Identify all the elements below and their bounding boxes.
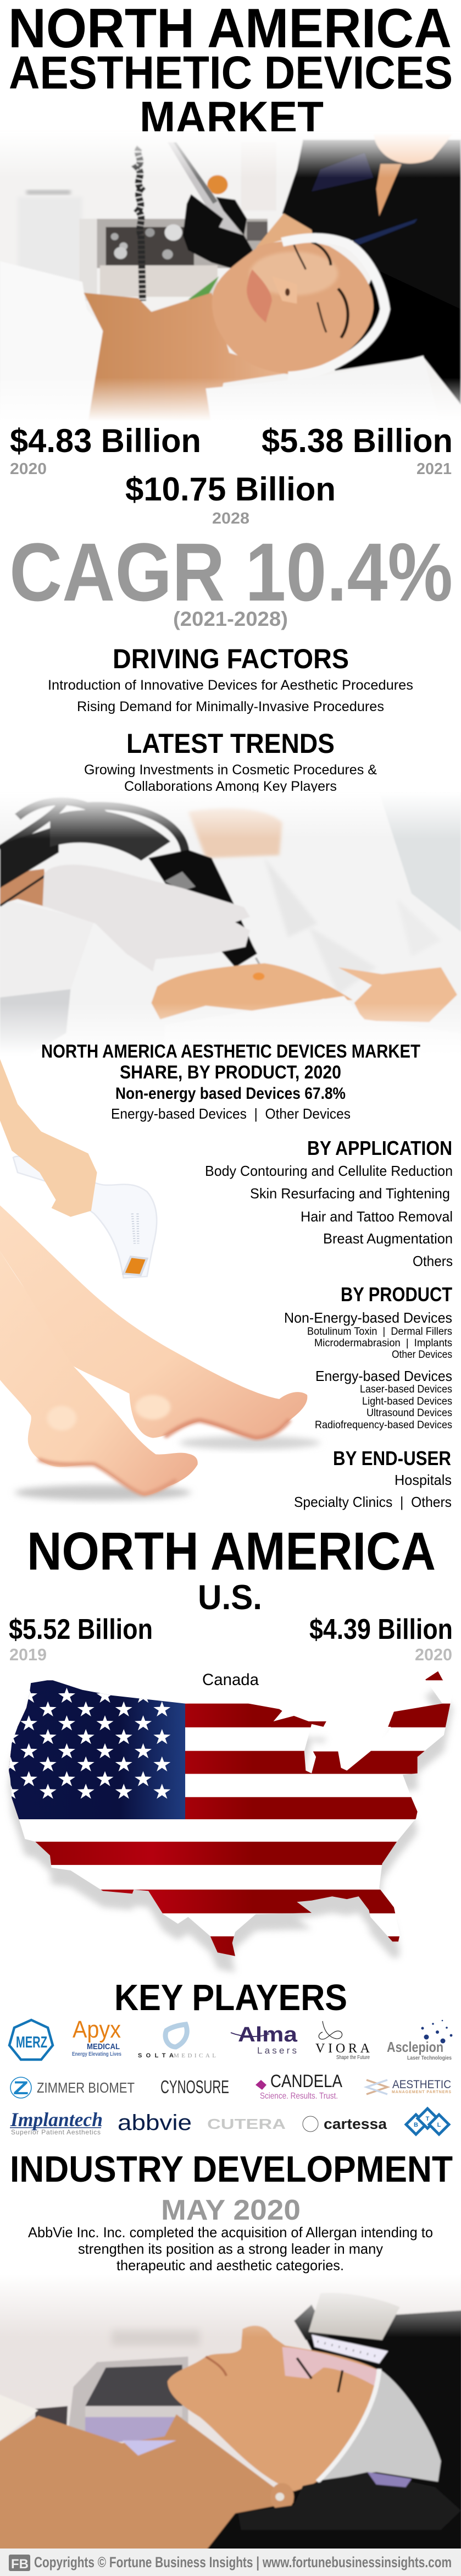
logo: BTL — [406, 2109, 449, 2134]
by product: Ultrasound Devices — [366, 1407, 452, 1419]
logo: Candela: Science. Results. Trust. — [260, 2091, 338, 2101]
ear — [270, 2483, 294, 2511]
face — [212, 241, 374, 375]
by end-user — [294, 1447, 452, 1510]
driving factors: Introduction of Innovative Devices for Aesthetic Procedures — [48, 678, 413, 693]
by product: Energy-based Devices — [315, 1368, 452, 1384]
face — [168, 2326, 379, 2491]
market share by product: Non-energy based Devices 67.8% — [115, 1085, 346, 1103]
logo: Viora: Shape the Future — [336, 2055, 370, 2061]
by product: Light-based Devices — [362, 1396, 452, 1407]
by product: Radiofrequency-based Devices — [315, 1419, 452, 1431]
title: MARKET — [140, 92, 324, 143]
by application: Hair and Tattoo Removal — [301, 1208, 453, 1225]
market share by product: Energy-based Devices | Other Devices — [111, 1105, 351, 1122]
logo: Viora — [315, 2021, 370, 2061]
by product: Microdermabrasion | Implants — [314, 1337, 452, 1349]
market size stats: $10.75 Billion — [125, 471, 336, 508]
logo: Asclepion: Asclepion — [387, 2039, 443, 2055]
industry development: strengthen its position as a strong leader in many — [78, 2241, 383, 2257]
market size stats: 2020 — [10, 460, 47, 478]
by application: Breast Augmentation — [323, 1230, 453, 1247]
laser handpiece — [169, 143, 242, 236]
logo: Implantech: Superior Patient Aesthetics — [11, 2128, 101, 2136]
practitioner coat — [0, 899, 94, 998]
logo: Apyx Medical: Apyx — [73, 2016, 121, 2043]
latest trends: Growing Investments in Cosmetic Procedures & — [84, 762, 377, 778]
logo: Viora: VIORA — [315, 2041, 370, 2056]
market share by product — [41, 1041, 420, 1122]
latest trends: LATEST TRENDS — [126, 728, 335, 759]
photo: laser on hand — [0, 787, 461, 1060]
collar — [0, 2392, 38, 2445]
logo: Solta Medical — [138, 2024, 216, 2059]
dark background — [200, 2310, 461, 2555]
market size stats — [10, 422, 453, 527]
industry development — [10, 2149, 453, 2274]
by application: Others — [413, 1253, 453, 1269]
by product: Non-Energy-based Devices — [284, 1309, 452, 1326]
shadows — [15, 1485, 191, 1500]
by product: Botulinum Toxin | Dermal Fillers — [307, 1326, 452, 1337]
logo: Cynosure: CYNOSURE — [160, 2077, 229, 2097]
U.S. market values: Canada — [202, 1671, 259, 1689]
key player logos — [9, 2016, 452, 2136]
logo: Asclepion: Laser Technologies — [407, 2055, 452, 2061]
logo: Alma Lasers: Lasers — [257, 2045, 297, 2056]
logo: Candela — [256, 2071, 343, 2101]
by end-user: Specialty Clinics | Others — [294, 1494, 452, 1510]
laser device — [148, 850, 257, 967]
logo: Merz: MERZ — [16, 2034, 47, 2051]
map: U.S. flag — [0, 1656, 461, 1979]
latest trends — [84, 728, 377, 794]
treated hand — [152, 963, 353, 1019]
logo: Zimmer Biomet — [10, 2077, 135, 2099]
by product: Laser-based Devices — [360, 1384, 452, 1395]
CAGR callout: (2021-2028) — [173, 608, 288, 630]
driving factors: DRIVING FACTORS — [113, 643, 349, 674]
title — [8, 0, 453, 143]
logo: AbbVie: abbvie — [118, 2111, 192, 2135]
logo: Implantech: Implantech — [10, 2109, 103, 2131]
logo: BTL: T — [426, 2116, 430, 2122]
industry development: therapeutic and aesthetic categories. — [116, 2257, 344, 2274]
white robe folds — [264, 858, 318, 937]
industry development: AbbVie Inc. Inc. completed the acquisition of Allergan intending to — [28, 2224, 433, 2241]
logo: Solta Medical: MEDICAL — [174, 2052, 216, 2059]
cable — [0, 801, 185, 852]
logo: Solta Medical: SOLTA — [138, 2052, 174, 2059]
LED applicator — [309, 2293, 400, 2340]
logo: Cartessa: cartessa — [324, 2116, 387, 2132]
logo: Asclepion — [387, 2020, 452, 2061]
logo: Merz — [9, 2020, 53, 2060]
by application — [205, 1137, 453, 1269]
market size stats: 2028 — [212, 510, 249, 527]
logo: Zimmer Biomet: Z — [13, 2078, 29, 2099]
by application: Skin Resurfacing and Tightening — [250, 1185, 450, 1202]
gloved hand — [183, 194, 253, 269]
illustration: hand with device and legs — [0, 1059, 320, 1500]
market size stats: 2021 — [416, 460, 452, 478]
market size stats: $4.83 Billion — [10, 422, 201, 459]
logo: Aesthetic Management Partners: AESTHETIC — [392, 2078, 451, 2091]
regional heading — [27, 1521, 436, 1617]
by application: Body Contouring and Cellulite Reduction — [205, 1163, 453, 1179]
U.S. market values: 2020 — [415, 1645, 452, 1664]
U.S. market values — [9, 1614, 453, 1689]
U.S. market values: 2019 — [9, 1645, 47, 1664]
headband — [320, 2369, 441, 2481]
icon: Fortune Business Insights logo: FB — [11, 2557, 29, 2572]
by product — [284, 1283, 452, 1431]
regional heading: U.S. — [198, 1578, 262, 1617]
by end-user: Hospitals — [395, 1472, 452, 1488]
logo: Aesthetic Management Partners: MANAGEMENT PARTNERS — [392, 2090, 451, 2094]
by product: Other Devices — [392, 1349, 452, 1361]
logo: Cutera: CUTERA — [207, 2116, 286, 2132]
logo: Aesthetic Management Partners — [366, 2078, 451, 2094]
footer — [0, 2549, 461, 2576]
driving factors: Rising Demand for Minimally-Invasive Procedures — [77, 699, 384, 714]
logo: Apyx Medical — [72, 2016, 121, 2057]
industry development: MAY 2020 — [161, 2194, 301, 2226]
practitioner — [281, 139, 461, 310]
shoulders and neck — [84, 293, 294, 421]
gloved hand — [43, 865, 250, 971]
latest trends: Collaborations Among Key Players — [124, 779, 337, 794]
wrist — [0, 869, 47, 907]
headband — [282, 238, 385, 376]
logo: BTL: L — [437, 2122, 441, 2128]
market share by product: SHARE, BY PRODUCT, 2020 — [120, 1062, 341, 1083]
logo: Alma Lasers: Alma — [238, 2023, 298, 2046]
body — [0, 2414, 294, 2555]
background device — [68, 2357, 188, 2439]
logo: Apyx Medical: MEDICAL — [87, 2042, 120, 2051]
logo: Apyx Medical: Energy Elevating Lives — [72, 2051, 121, 2057]
U.S. market values: $5.52 Billion — [9, 1614, 153, 1645]
sheet — [14, 266, 101, 382]
photo: facial laser treatment — [0, 126, 461, 427]
hair and glove — [331, 269, 461, 405]
logo: Candela: CANDELA — [270, 2071, 343, 2091]
pillow — [205, 354, 425, 419]
blurred skin behind — [188, 808, 282, 858]
photo: LED facial treatment — [0, 2269, 461, 2555]
driving factors — [48, 643, 413, 714]
logo: Alma Lasers — [231, 2023, 298, 2056]
market size stats: $5.38 Billion — [262, 422, 453, 459]
logo: BTL: B — [414, 2122, 418, 2128]
logo: Zimmer Biomet: ZIMMER BIOMET — [37, 2079, 135, 2096]
glove — [238, 2472, 461, 2530]
key players heading: KEY PLAYERS — [114, 1977, 347, 2018]
